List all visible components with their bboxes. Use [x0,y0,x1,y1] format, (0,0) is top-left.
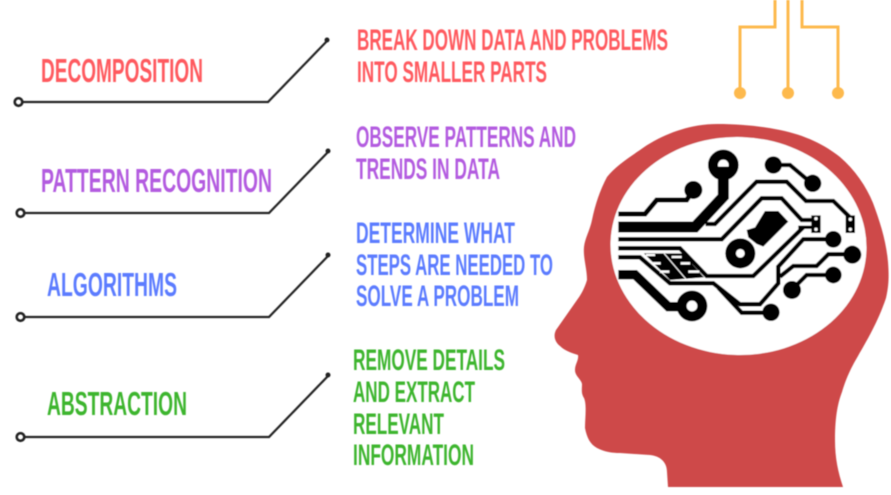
bottom left thick trace [618,275,683,307]
icon: orange circuit lines above head [734,0,844,99]
connector line: pattern recognition [17,148,330,217]
description: abstraction: RELEVANT [353,408,444,441]
description: abstraction [353,344,505,472]
description: decomposition [357,24,668,89]
centre chip [747,211,788,247]
connector line: abstraction [17,372,330,441]
label: abstraction: ABSTRACTION [47,386,187,423]
description: pattern recognition [356,121,576,186]
icon: red head silhouette [555,124,889,487]
top left traces [618,190,693,214]
icon: white brain area [607,133,870,359]
label: decomposition: DECOMPOSITION [41,53,203,90]
description: abstraction: AND EXTRACT [353,376,475,409]
description: decomposition: BREAK DOWN DATA AND PROBLEMS [357,24,668,57]
description: abstraction: REMOVE DETAILS [353,344,505,377]
label: algorithms: ALGORITHMS [47,267,177,304]
description: decomposition: INTO SMALLER PARTS [357,56,547,89]
description: abstraction: INFORMATION [353,439,474,472]
label: pattern recognition: PATTERN RECOGNITION [41,163,272,200]
connector line: algorithms [17,252,330,321]
description: algorithms [356,217,553,313]
middle traces [618,198,815,239]
top right node [773,165,812,183]
description: algorithms: STEPS ARE NEEDED TO [356,249,553,282]
connector line: decomposition [15,38,329,106]
grid pads [644,253,704,280]
description: pattern recognition: OBSERVE PATTERNS AND [356,121,576,154]
description: pattern recognition: TRENDS IN DATA [356,153,500,186]
icon: circuit board brain [618,155,861,321]
lower traces [618,227,803,276]
description: algorithms: SOLVE A PROBLEM [356,280,519,313]
description: algorithms: DETERMINE WHAT [356,217,515,250]
